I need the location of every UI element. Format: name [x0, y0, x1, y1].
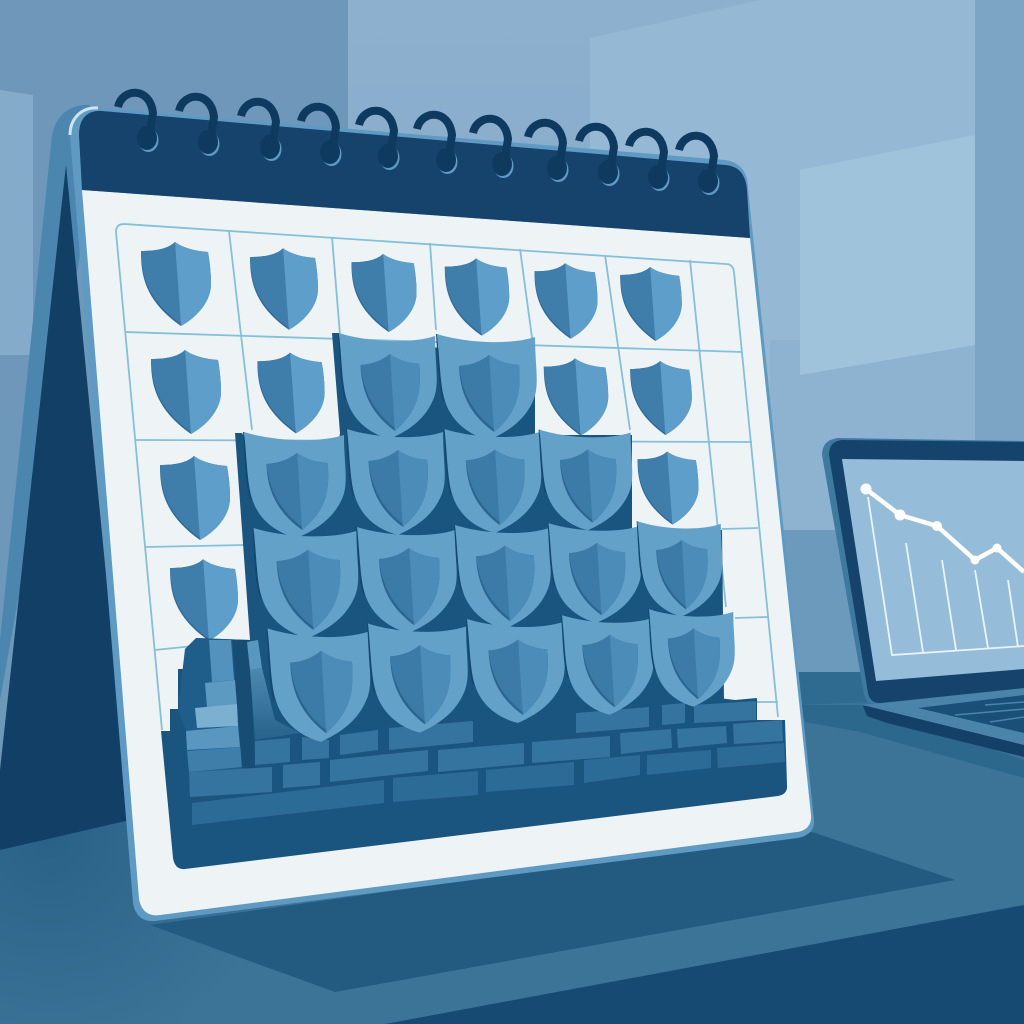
big shields row 1 — [338, 333, 537, 440]
big shields row 2 — [243, 429, 632, 538]
laptop shadow — [800, 705, 1024, 778]
keyboard — [918, 695, 1024, 733]
calendar page rim — [70, 108, 814, 921]
shields row 3 — [160, 451, 698, 540]
brick row 1 — [255, 701, 756, 765]
stack backing — [235, 333, 724, 750]
dark base panel — [161, 638, 787, 869]
calendar back stand — [0, 105, 130, 850]
laptop lid — [822, 438, 1024, 704]
brick row 3 — [192, 743, 785, 825]
calendar header — [79, 111, 750, 238]
laptop base — [863, 688, 1024, 757]
shield row 4 — [170, 559, 238, 641]
small shields — [141, 242, 698, 641]
laptop screen — [842, 459, 1024, 681]
binder rings — [118, 93, 720, 195]
laptop — [822, 438, 1024, 757]
brick row 2 — [189, 720, 783, 797]
calendar — [0, 93, 814, 921]
calendar cast shadow — [150, 832, 955, 992]
calendar white page — [82, 190, 811, 915]
big shields row 3 — [252, 521, 722, 638]
big shield stack — [243, 333, 735, 742]
calendar grid — [116, 224, 778, 730]
shields row 2 — [151, 350, 692, 436]
desk — [0, 672, 1024, 1024]
shields row 1 — [141, 242, 682, 341]
line chart — [860, 484, 1024, 655]
big shields row 4 — [266, 609, 735, 742]
brick wall — [189, 701, 785, 825]
step pile — [178, 638, 300, 772]
desk front edge — [385, 905, 1024, 1024]
